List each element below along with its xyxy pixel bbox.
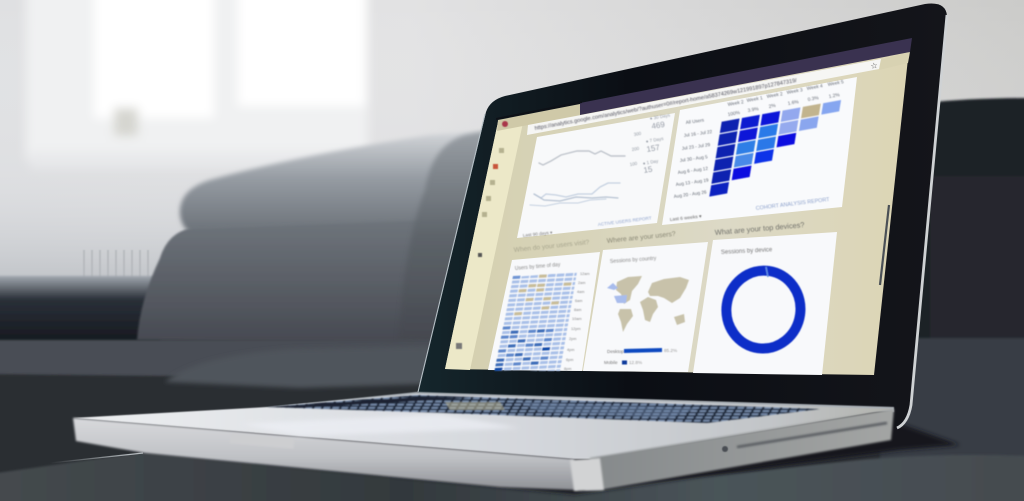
time axis labels: 12pm [571,327,580,331]
panel title: Users by time of day [515,262,561,272]
section headings: What are your top devices? [714,220,805,237]
dark underlay below the sofa line [0,338,1024,501]
dark sofa back, far left [0,276,160,342]
time heatmap grid [494,272,577,371]
period selector: Last 90 days ▾ [523,230,553,238]
device share legend: 12.8% [629,360,642,365]
time axis labels: 8pm [564,367,571,371]
time axis labels [564,272,590,371]
cohort row labels [673,117,713,199]
cohort row labels: Aug 6 - Aug 12 [677,166,709,175]
cohort row labels: Jul 30 - Aug 5 [679,154,708,163]
table edge highlight [50,453,143,463]
window close dot [502,121,508,127]
cohort header: 1.2% [828,92,841,100]
active users numbers: ● 1 Day [642,158,659,166]
left navigation strip [445,118,524,370]
panel title: Sessions by device [721,247,773,256]
screen surface [445,40,910,375]
inner seat cushion [165,346,430,388]
active users numbers: 200 [631,146,640,152]
address bar [527,59,881,135]
time axis labels: 6am [575,299,582,303]
panel title: Sessions by country [610,256,657,265]
sofa, right back cushion [905,98,1024,345]
base top surface [73,394,894,459]
cohort header: Week 4 [806,83,824,92]
time axis labels: 8am [574,308,581,312]
device share legend: Mobile [604,360,618,365]
side port slot [737,423,887,447]
active users report link: ACTIVE USERS REPORT [598,215,652,227]
device share legend [604,348,677,365]
cohort period selector: Last 6 weeks ▾ [670,214,702,223]
active users numbers: 157 [646,143,661,154]
cohort report link: COHORT ANALYSIS REPORT [756,197,831,212]
active users numbers: 15 [643,164,654,175]
base back edge [267,392,894,412]
audio port [722,446,728,452]
time axis labels: 6pm [566,358,573,362]
tab strip [497,104,580,131]
time axis labels: 2pm [569,337,576,341]
cohort header: Week 2 [727,99,745,108]
active users numbers: 100 [629,161,638,167]
time axis labels: 10am [572,317,582,321]
seat front [0,374,430,480]
cohort header: Week 3 [786,87,804,96]
front left face [73,418,578,490]
active users numbers [629,112,671,175]
window with blown-out light [26,0,375,168]
lid bezel [418,4,947,428]
cohort header: Week 5 [827,79,845,88]
device share legend: 85.2% [664,348,677,353]
trackpad reflection [240,414,520,436]
world map [607,276,689,332]
sofa, left and centre [0,130,490,480]
lower back cushion [137,218,470,342]
cohort row labels: Aug 13 - Aug 19 [675,177,709,187]
cohort row labels: All Users [685,117,705,125]
lid left edge [418,114,485,392]
time axis labels: 4pm [567,348,574,352]
time axis labels: 4am [577,290,584,294]
donut chart [721,266,805,353]
section headings: When do your users visit? [513,239,590,254]
front latch [230,433,294,449]
section headings [513,220,805,254]
device share legend: Desktop [607,349,624,354]
side button shadow [880,205,889,285]
laptop shadow [120,420,960,494]
laptop lid and screen [418,4,947,428]
panel: active users line chart [517,112,675,238]
active users numbers: 469 [651,120,666,131]
chart lines [530,151,625,206]
cohort heatmap cells [709,100,841,197]
panel: cohort analysis [662,77,857,225]
sofa seat, right side [880,338,1024,468]
cohort header: 0.3% [807,95,820,103]
dark tab bar [580,38,912,115]
cohort header: Week 2 [766,91,784,100]
cohort header: Week 1 [746,95,764,104]
upper back cushion [180,132,480,232]
cohort header: 3.9% [747,106,760,114]
time axis labels: 2am [578,281,585,285]
section headings: Where are your users? [606,231,676,245]
cohort header [727,79,845,118]
active users numbers: 300 [633,131,642,137]
seat upper face [0,340,435,380]
cohort header: 1.6% [787,99,800,107]
keyboard [267,395,820,423]
laptop base [73,392,894,491]
address bar: ☆ [870,61,878,71]
radiator under window [84,250,148,278]
active users numbers: ● 7 Days [645,136,665,144]
cohort row labels: Aug 20 - Aug 26 [673,189,707,199]
browser toolbar right [879,52,910,70]
panel: sessions by country [583,242,708,372]
sidebar icons [456,148,504,349]
front right face [585,409,894,490]
time axis labels: 12am [580,272,590,276]
address bar: https://analytics.google.com/analytics/web/?authuser=0#/report-home/a58374269w121991897p127847319/ [534,78,798,132]
panel: users by time of day [488,252,600,371]
bezel above tab strip left [496,101,582,120]
active users numbers: ● 30 Days [649,112,671,121]
cohort header: 100% [727,110,741,118]
corner highlight [570,458,604,491]
cohort row labels: Jul 16 - Jul 22 [683,129,713,138]
cohort header: 2% [768,103,777,110]
lid silver edge [897,15,947,428]
foreground surface [0,452,1024,501]
panel: sessions by device [693,232,837,375]
cohort row labels: Jul 23 - Jul 29 [681,142,711,151]
sofa arm near laptop [398,130,490,342]
